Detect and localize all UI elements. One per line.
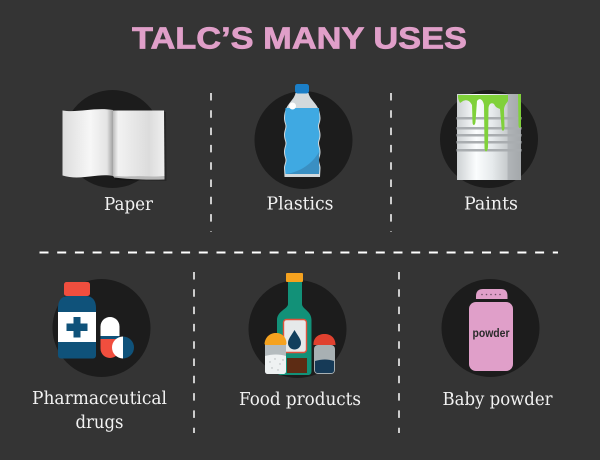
icon: paint can (456, 94, 522, 180)
panel: paper (62, 90, 166, 215)
panel: paints (440, 90, 538, 214)
label: paper: Paper (104, 195, 154, 215)
dividers (40, 93, 558, 433)
label: pharmaceutical drugs: drugs (76, 413, 124, 433)
label: pharmaceutical drugs: Pharmaceutical (32, 389, 167, 409)
title: TALC’S MANY USES (132, 22, 467, 56)
label: plastics: Plastics (266, 194, 334, 214)
icon: medicine bottle and pills (58, 282, 134, 358)
label: food products: Food products (239, 390, 361, 410)
label: baby powder: Baby powder (442, 390, 553, 410)
panel: baby powder (442, 279, 553, 410)
icon: open book (62, 109, 166, 181)
panel: pharmaceutical drugs (32, 279, 167, 433)
icon: sauce bottle and shakers (264, 273, 336, 375)
icon: water bottle (284, 84, 320, 177)
label: pharmaceutical drugs (32, 389, 167, 433)
panel: food products (239, 273, 361, 410)
panel: plastics (254, 84, 352, 214)
icon: powder bottle: powder (472, 328, 510, 340)
label: paints: Paints (464, 194, 518, 214)
